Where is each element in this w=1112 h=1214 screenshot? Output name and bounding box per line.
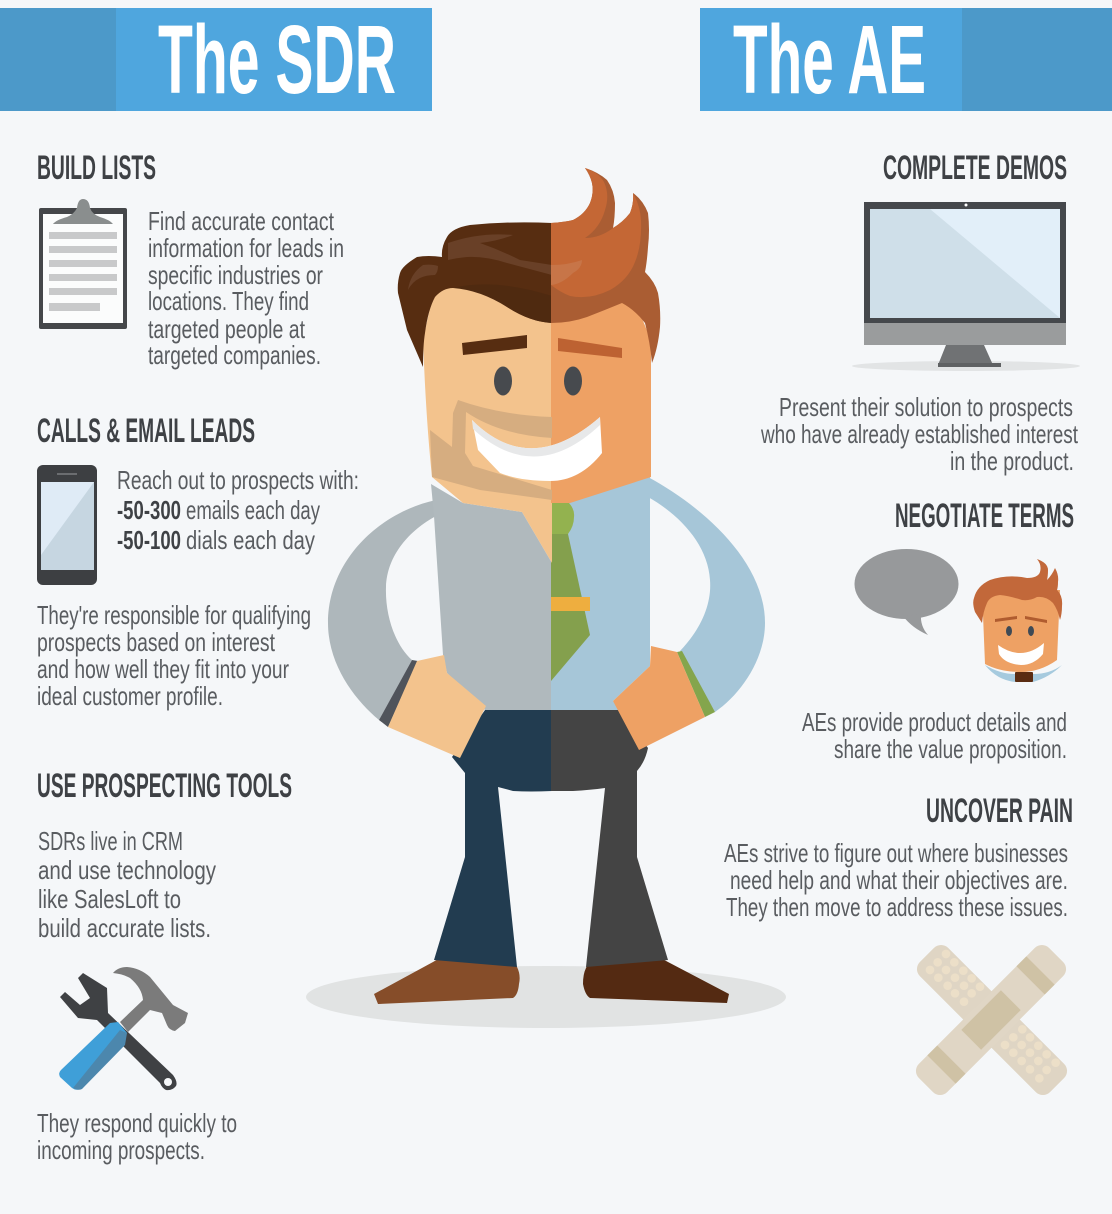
panel: uncover pain [724, 792, 1073, 1099]
header: The AE: The AE [733, 5, 926, 114]
beard [430, 400, 552, 500]
text: build lists description: specific industries or [148, 260, 323, 290]
right cuff [677, 651, 715, 717]
text: outreach volumes: -50-100 [117, 525, 181, 555]
ground shadow [306, 966, 786, 1028]
icon: phone [37, 465, 97, 585]
left shirt [431, 484, 552, 710]
right sleeve [648, 477, 765, 712]
icon: monitor [852, 202, 1080, 371]
text: qualifying prospects: They're responsible for qualifying [37, 600, 311, 630]
text: responding quickly: incoming prospects. [37, 1135, 205, 1165]
text: qualifying prospects: and how well they fit into your [37, 654, 289, 684]
heading: build lists: BUILD LISTS [37, 149, 156, 187]
text: demos description [760, 392, 1079, 476]
text: outreach volumes: Reach out to prospects with: [117, 465, 359, 495]
text: CRM and technology: and use technology [38, 855, 216, 885]
header: The SDR: The SDR [158, 5, 396, 114]
text: responding quickly: They respond quickly to [37, 1108, 237, 1138]
icon: clipboard [39, 199, 127, 329]
right shoe [583, 955, 729, 1003]
text: outreach volumes: dials each day [186, 525, 315, 555]
heading: use prospecting tools: USE PROSPECTING TOOLS [37, 767, 292, 805]
panel: calls and email leads [37, 412, 359, 711]
text: responding quickly [37, 1108, 237, 1165]
hair: right orange half [551, 168, 660, 363]
text: qualifying prospects: ideal customer profile. [37, 681, 223, 711]
text: uncover pain description [724, 838, 1068, 922]
text: negotiate description [802, 707, 1067, 764]
text: qualifying prospects [37, 600, 311, 711]
text: outreach volumes [117, 465, 359, 555]
text: CRM and technology [38, 826, 216, 943]
left eyebrow [462, 335, 527, 355]
left trouser leg [434, 710, 552, 967]
panel: use prospecting tools [37, 767, 292, 1165]
text: outreach volumes: emails each day [186, 495, 320, 525]
text: build lists description [148, 206, 344, 370]
right trouser leg [551, 710, 668, 967]
icon: crossed bandages [912, 941, 1071, 1099]
panel: complete demos [760, 149, 1080, 476]
tie [551, 502, 590, 681]
text: build lists description: information for leads in [148, 233, 344, 263]
text: CRM and technology: SDRs live in CRM [38, 826, 183, 856]
right shirt [551, 477, 650, 710]
text: qualifying prospects: prospects based on interest [37, 627, 276, 657]
text: outreach volumes: -50-300 [117, 495, 181, 525]
text: build lists description: targeted companies. [148, 340, 321, 370]
mouth [472, 417, 602, 481]
left shoe [374, 955, 520, 1004]
panel: build lists [37, 149, 344, 370]
right eyebrow [558, 338, 622, 358]
left sleeve [328, 500, 436, 720]
face: right half [551, 290, 651, 503]
icon: wrench and hammer [59, 967, 188, 1090]
icon: small AE face [973, 559, 1062, 682]
text: CRM and technology: like SalesLoft to [38, 884, 181, 914]
eyes [494, 366, 582, 396]
text: CRM and technology: build accurate lists. [38, 913, 211, 943]
heading: calls and email leads: CALLS & EMAIL LEADS [37, 412, 255, 450]
text: build lists description: targeted people at [148, 314, 306, 344]
text: demos description: in the product. [950, 446, 1074, 476]
text: build lists description: locations. They find [148, 286, 309, 316]
hair: left dark half [398, 222, 552, 367]
icon: speech bubble [854, 549, 958, 635]
panel: negotiate terms [802, 497, 1074, 764]
text: build lists description: Find accurate contact [148, 206, 335, 236]
face: left half [423, 285, 552, 563]
right hand [613, 646, 705, 750]
left hand [388, 655, 486, 758]
illustration: split-character figure [306, 168, 786, 1028]
header: The SDR [0, 5, 432, 114]
left cuff [379, 660, 418, 727]
